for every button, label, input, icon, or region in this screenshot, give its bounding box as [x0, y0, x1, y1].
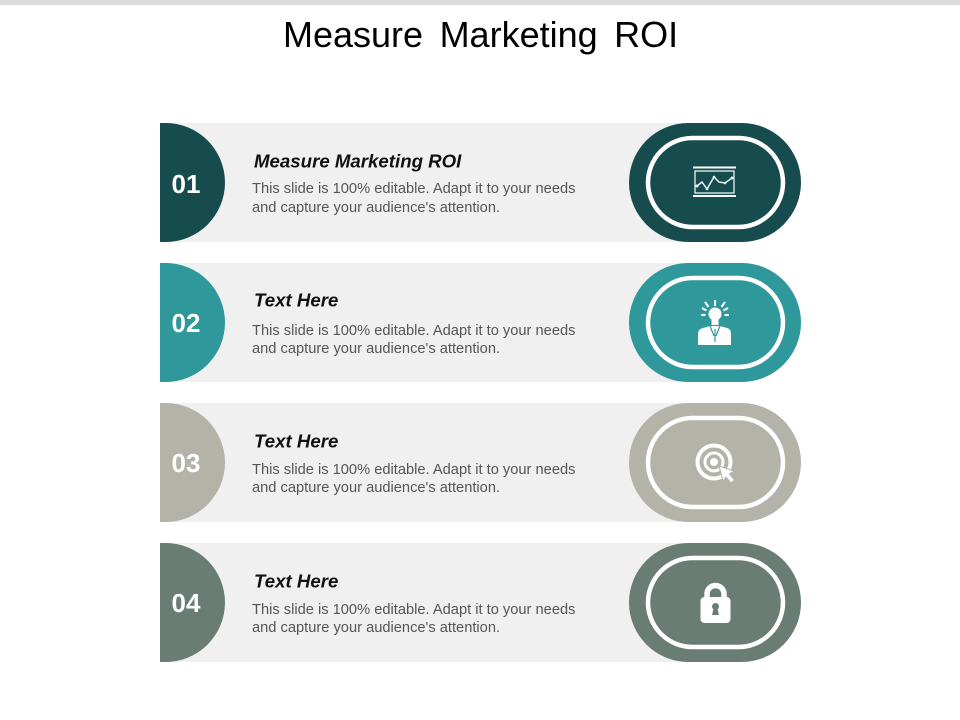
row 03 heading: Text Here — [254, 430, 338, 452]
row 02 number: 02 — [172, 308, 200, 338]
row 01 pill inner ring — [648, 138, 783, 227]
row 01 heading: Measure Marketing ROI — [254, 150, 462, 172]
row 01 background bar — [160, 123, 680, 242]
panel: row 02 — [160, 263, 801, 382]
icon: padlock — [700, 586, 730, 623]
row 02 heading: Text Here — [254, 290, 338, 310]
row 03 pill — [629, 403, 801, 522]
row 02 description: This slide is 100% editable. Adapt it to your needs — [252, 323, 575, 339]
row 04 description: This slide is 100% editable. Adapt it to your needs — [252, 602, 575, 618]
row 04 heading: Text Here — [254, 570, 338, 592]
row 01 description: This slide is 100% editable. Adapt it to your needs — [252, 181, 575, 197]
row 03 background bar — [160, 403, 680, 522]
panel: row 04 — [160, 543, 801, 662]
row 01 number tab — [160, 123, 225, 242]
row 04 pill — [629, 543, 801, 662]
row 04 description: and capture your audience's attention. — [252, 620, 500, 636]
row 02 pill — [629, 263, 801, 382]
row 04 pill inner ring — [648, 558, 783, 647]
row 04 background bar — [160, 543, 680, 662]
row 04 number: 04 — [172, 588, 201, 618]
row 03 number: 03 — [172, 448, 200, 478]
row 03 number tab — [160, 403, 225, 522]
row 03 pill inner ring — [648, 418, 783, 507]
row 02 background bar — [160, 263, 680, 382]
icon: target with cursor — [698, 446, 734, 483]
row 03 description: and capture your audience's attention. — [252, 480, 500, 496]
row 01 pill — [629, 123, 801, 242]
row 01 number: 01 — [172, 169, 200, 199]
row 02 number tab — [160, 263, 225, 382]
row 03 description: This slide is 100% editable. Adapt it to your needs — [252, 462, 575, 478]
icon: businessman with light bulb head — [698, 300, 731, 345]
panel: row 03 — [160, 403, 801, 522]
panel: row 01 — [160, 123, 801, 242]
row 02 pill inner ring — [648, 278, 783, 367]
row 04 number tab — [160, 543, 225, 662]
icon: line chart on screen — [693, 168, 736, 196]
row 02 description: and capture your audience's attention. — [252, 341, 500, 357]
row 01 description: and capture your audience's attention. — [252, 200, 500, 216]
title: Measure Marketing ROI — [283, 14, 678, 55]
